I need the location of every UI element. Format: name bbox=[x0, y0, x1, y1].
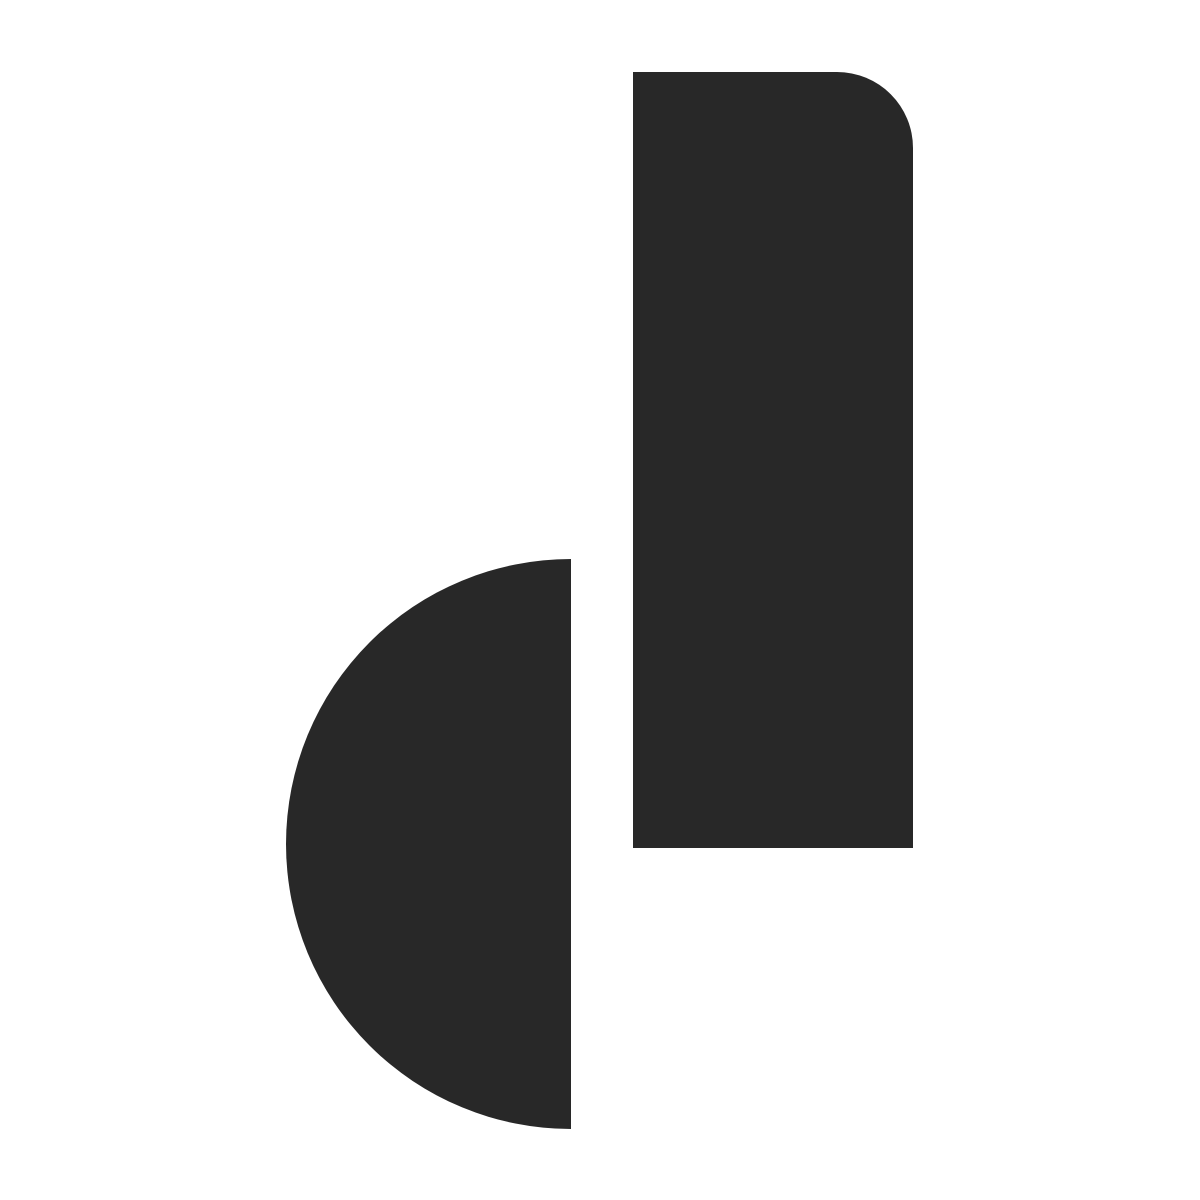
shape: left half circle bbox=[286, 559, 571, 1129]
shape: rounded rectangle bbox=[633, 72, 913, 848]
